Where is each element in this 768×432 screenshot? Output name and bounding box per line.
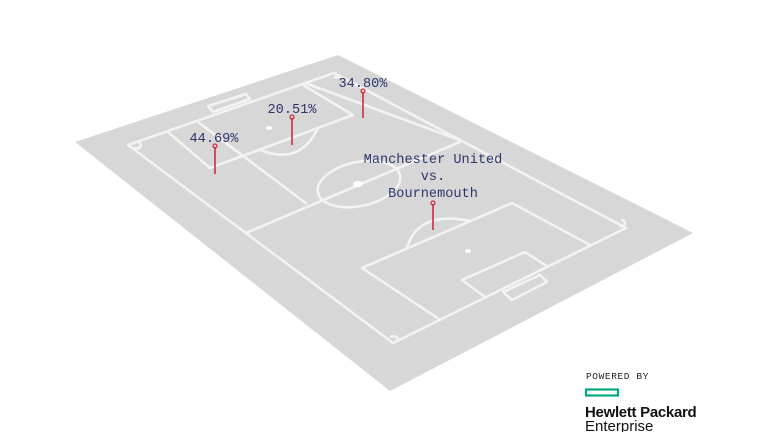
label: 34.80% bbox=[339, 77, 388, 118]
pitch bbox=[75, 55, 693, 391]
title: match: vs. bbox=[421, 170, 445, 185]
logo: Hewlett Packard Enterprise: Hewlett Packard bbox=[585, 404, 697, 421]
label: 20.51%: 20.51% bbox=[268, 103, 317, 118]
logo: Hewlett Packard Enterprise: POWERED BY bbox=[586, 371, 649, 382]
label: 44.69% bbox=[190, 132, 239, 174]
label: 34.80%: 34.80% bbox=[339, 77, 388, 92]
title: match: Bournemouth bbox=[388, 187, 478, 202]
label: 44.69%: 44.69% bbox=[190, 132, 239, 147]
label: 20.51% bbox=[268, 103, 317, 145]
title: match bbox=[364, 153, 502, 230]
title: match: Manchester United bbox=[364, 153, 502, 168]
logo: Hewlett Packard Enterprise bbox=[585, 371, 697, 432]
